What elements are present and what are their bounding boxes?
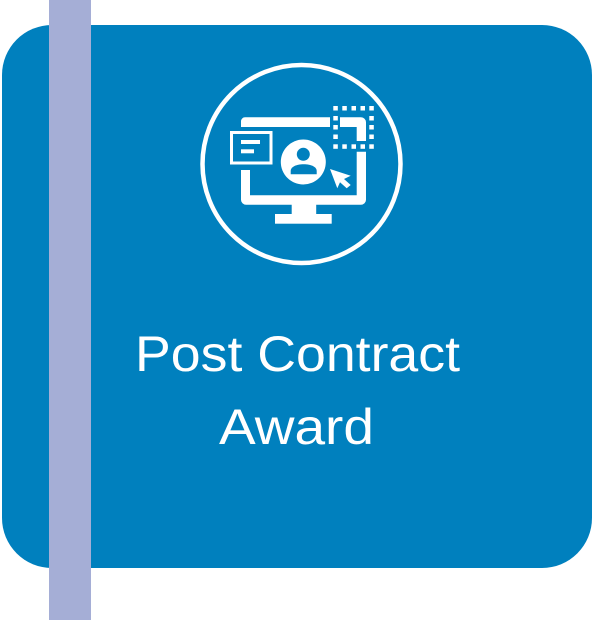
title line 1: Post Contract [135,326,460,382]
text card window [232,132,271,163]
vertical lavender bar [49,0,91,620]
icon ring [202,65,400,263]
monitor frame [241,117,366,224]
dotted selection square [333,106,374,149]
title line 2: Award [219,399,374,455]
title [135,326,460,455]
mouse cursor arrow [330,169,351,188]
user avatar [281,140,326,184]
icon: monitor with user in a circle [202,65,400,263]
